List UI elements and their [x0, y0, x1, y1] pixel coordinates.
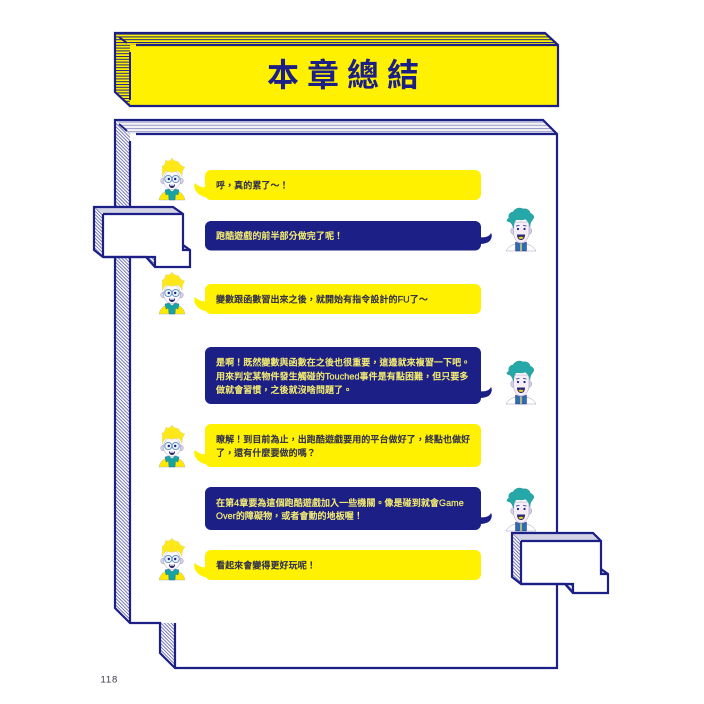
speech bubble 7: [194, 550, 481, 580]
speech bubble 4: 做就會習慣，之後就沒啥問題了。: [216, 384, 352, 395]
icon: blond boy 3: [159, 425, 185, 467]
speech bubble 5: 瞭解！到目前為止，出跑酷遊戲要用的平台做好了，終點也做好: [216, 434, 470, 444]
icon: teal-haired man 3: [506, 488, 536, 531]
speech bubble 3: [194, 284, 481, 314]
speech bubble 4: [205, 347, 492, 404]
icon: teal-haired man 2: [506, 361, 536, 404]
speech bubble 4: 用來判定某物件發生觸碰的Touched事件是有點困難，但只要多: [216, 370, 469, 381]
page number: 118: [100, 674, 118, 686]
empty callout: left: [94, 207, 190, 267]
title banner: [115, 33, 558, 106]
speech bubble 1: 呼，真的累了～！: [216, 180, 289, 190]
speech bubble 4: 是啊！既然變數與函數在之後也很重要，這邊就來複習一下吧。: [216, 356, 470, 368]
speech bubble 3: 變數跟函數習出來之後，就開始有指令設計的FU了～: [216, 294, 428, 304]
panel: dialogue page: [115, 120, 557, 668]
title text: 本章總結: [267, 57, 427, 93]
speech bubble 1: [194, 170, 481, 200]
speech bubble 5: [194, 424, 481, 467]
icon: teal-haired man 1: [506, 208, 536, 251]
speech bubble 7: 看起來會變得更好玩呢！: [216, 560, 316, 570]
icon: blond boy 2: [159, 272, 185, 314]
speech bubble 6: Over的障礙物，或者會動的地板喔！: [216, 510, 363, 521]
speech bubble 6: [205, 487, 492, 530]
speech bubble 2: 跑酷遊戲的前半部分做完了呢！: [216, 230, 343, 241]
speech bubble 5: 了，還有什麼要做的嗎？: [216, 447, 316, 458]
icon: blond boy 1: [159, 158, 185, 200]
speech bubble 2: [205, 221, 492, 250]
icon: blond boy 4: [159, 538, 185, 580]
empty callout: right: [512, 533, 608, 593]
speech bubble 6: 在第4章要為這個跑酷遊戲加入一些機關。像是碰到就會Game: [216, 497, 464, 508]
